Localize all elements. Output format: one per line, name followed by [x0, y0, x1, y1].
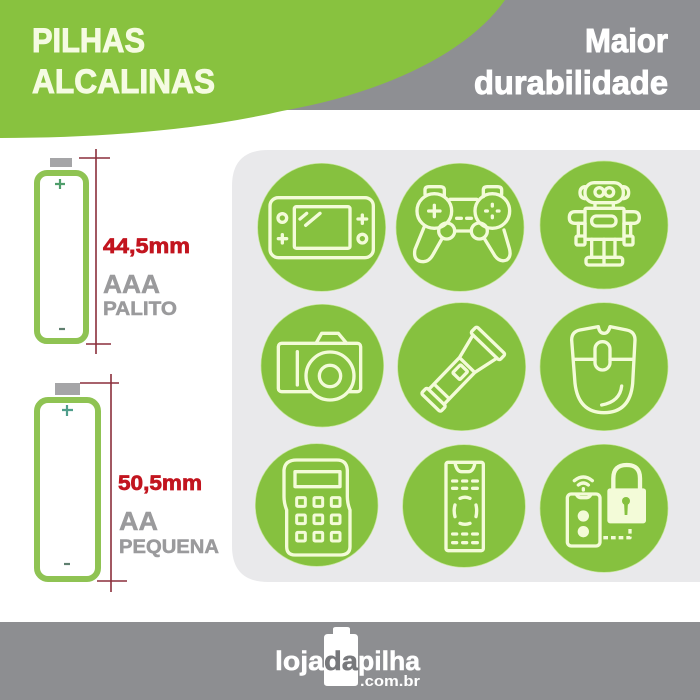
label: AA Pequena: PEQUENA	[119, 537, 219, 558]
label: AAA Palito: AAA	[103, 269, 160, 299]
logo: lojadapilha.com.br: pilha	[358, 646, 421, 676]
header band	[0, 0, 700, 138]
label: AAA Palito: PALITO	[103, 299, 177, 320]
title: Pilhas Alcalinas	[32, 22, 215, 101]
label: AA Pequena	[119, 506, 219, 558]
icon: calculator	[255, 444, 378, 566]
logo: lojadapilha.com.br: loja	[275, 646, 325, 676]
logo: lojadapilha.com.br: .com.br	[360, 673, 420, 690]
label: 44,5mm: 44,5mm	[103, 235, 190, 258]
panel: device background	[232, 150, 700, 582]
icon: flashlight	[398, 303, 526, 431]
logo: lojadapilha.com.br: da	[324, 646, 359, 676]
footer band	[0, 622, 700, 700]
battery: AAA	[37, 158, 86, 341]
heading: Maior durabilidade: durabilidade	[474, 64, 668, 101]
icon: robot	[540, 161, 668, 289]
heading: Maior durabilidade: Maior	[585, 22, 668, 59]
label: AA Pequena: AA	[119, 506, 158, 536]
heading: Maior durabilidade	[474, 22, 668, 101]
logo: lojadapilha.com.br	[275, 627, 421, 690]
icon: computer mouse	[540, 303, 668, 431]
icon: smart lock	[540, 444, 668, 572]
label: AAA Palito	[103, 269, 177, 320]
dimension line: AAA	[79, 149, 111, 354]
icon: remote control	[403, 445, 525, 567]
icon: camera	[261, 304, 384, 427]
title: Pilhas Alcalinas: PILHAS	[32, 22, 145, 60]
title: Pilhas Alcalinas: ALCALINAS	[32, 63, 215, 101]
battery: AA	[37, 383, 98, 579]
icon: handheld game console	[258, 163, 386, 291]
label: 50,5mm: 50,5mm	[118, 472, 202, 495]
dimension line: AA	[80, 374, 127, 592]
icon: gamepad	[396, 163, 524, 291]
